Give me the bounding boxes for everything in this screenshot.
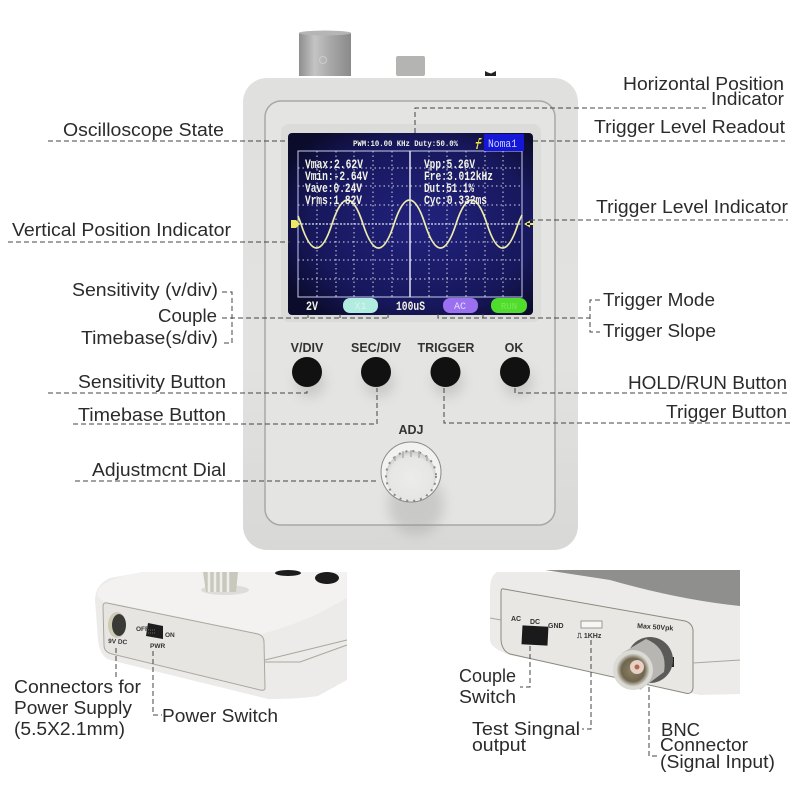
switch captions: ON xyxy=(165,632,175,639)
icon: top BNC connector xyxy=(299,30,351,76)
AC pill: AC xyxy=(454,302,466,313)
top surface xyxy=(97,572,347,634)
knob and button shadows xyxy=(295,367,533,535)
icon: trigger slope xyxy=(476,138,482,149)
screen glass xyxy=(545,570,740,606)
icon: trigger level marker xyxy=(524,220,534,228)
label: Oscilloscope State: Oscilloscope State xyxy=(63,120,224,140)
label: BNC Connector: BNC xyxy=(661,720,700,740)
measurements left: Vrms:1.82V xyxy=(305,194,362,208)
icon: adjustment dial xyxy=(381,442,441,502)
switch captions xyxy=(511,616,564,630)
label: Horizontal Position Indicator: Indicator xyxy=(711,89,784,109)
label: Power Switch: Power Switch xyxy=(162,706,278,726)
label: BNC Connector xyxy=(660,720,775,772)
label: Trigger Slope: Trigger Slope xyxy=(603,321,716,341)
icon: dial base xyxy=(201,572,249,595)
side panel xyxy=(501,589,693,693)
measurements left: Vave:0.24V xyxy=(305,182,362,196)
panel: power side view xyxy=(95,570,347,699)
inner panel outline xyxy=(265,101,555,525)
label: Trigger Button: Trigger Button xyxy=(666,402,787,422)
sensitivity value: 2V xyxy=(306,300,318,314)
button captions: V/DIV xyxy=(291,341,324,355)
trigger mode readout xyxy=(484,134,524,151)
icon: buttons xyxy=(275,570,339,584)
label: Sensitivity Button: Sensitivity Button xyxy=(78,372,226,392)
icon: top test tab xyxy=(396,56,425,76)
AC pill xyxy=(443,298,478,313)
label: Connectors for Power Supply xyxy=(14,677,141,739)
icon: power switch xyxy=(146,623,163,639)
leader lines: input side xyxy=(520,640,659,756)
label: Couple Switch xyxy=(459,666,516,707)
panel: oscilloscope front view xyxy=(243,30,578,550)
switch captions: GND xyxy=(548,623,564,630)
label: Test Signal output: output xyxy=(472,735,526,755)
label: Trigger Mode: Trigger Mode xyxy=(603,290,715,310)
grid xyxy=(298,151,522,297)
buttons xyxy=(292,357,530,387)
icon: top black clip xyxy=(485,71,496,76)
icon: test signal terminal xyxy=(581,621,602,628)
leader lines: front view xyxy=(8,108,790,481)
switch captions: OFF xyxy=(136,626,149,633)
label: Connectors for Power Supply: (5.5X2.1mm) xyxy=(14,719,125,739)
panel: input side view xyxy=(490,570,740,695)
label: Couple Switch: Switch xyxy=(459,687,516,707)
measurements right: Vpp:5.26V xyxy=(424,158,475,172)
button captions: ADJ xyxy=(398,423,424,437)
side panel xyxy=(103,603,265,690)
leader lines: power side xyxy=(116,648,162,715)
label: Couple Switch: Couple xyxy=(459,666,516,686)
PWM readout: PWM:10.00 KHz Duty:50.0% xyxy=(353,140,458,149)
button captions: TRIGGER xyxy=(418,341,474,355)
trigger mode readout: Noma1 xyxy=(488,139,517,151)
label: BNC Connector: (Signal Input) xyxy=(660,752,775,772)
icon: coupling switch xyxy=(521,625,548,646)
timebase value: 100uS xyxy=(396,300,425,314)
label: Trigger Level Indicator: Trigger Level Indicator xyxy=(596,197,788,217)
label: Timebase(s/div): Timebase(s/div) xyxy=(81,328,218,348)
label: Test Signal output: Test Singnal xyxy=(472,719,580,739)
label: Connectors for Power Supply: Connectors for xyxy=(14,677,141,697)
measurements right: Dut:51.1% xyxy=(424,182,474,196)
RUN pill: RUN xyxy=(501,302,517,312)
label: HOLD/RUN Button: HOLD/RUN Button xyxy=(628,373,787,393)
device body xyxy=(490,572,740,695)
label: BNC Connector: Connector xyxy=(660,735,748,755)
device body xyxy=(95,572,347,699)
coupling multiplier pill: X1 xyxy=(354,302,367,313)
button captions: SEC/DIV xyxy=(351,341,402,355)
label: Vertical Position Indicator: Vertical Position Indicator xyxy=(12,220,231,240)
switch captions: PWR xyxy=(150,643,165,650)
label: Connectors for Power Supply: Power Supply xyxy=(14,698,132,718)
voltage caption: Max 50Vpk xyxy=(637,623,674,633)
label: Couple: Couple xyxy=(158,306,217,326)
label: Adjustment Dial: Adjustmcnt Dial xyxy=(92,460,226,480)
label: Horizontal Position Indicator xyxy=(623,74,784,109)
screen bezel xyxy=(281,124,541,322)
label: Horizontal Position Indicator: Horizontal Position xyxy=(623,74,784,94)
test signal caption: ⎍ 1KHz xyxy=(576,633,602,640)
measurements left: Vmax:2.62V xyxy=(305,158,363,172)
jack caption: 9V DC xyxy=(108,638,128,646)
measurements left xyxy=(305,158,368,208)
label: Timebase Button: Timebase Button xyxy=(78,405,226,425)
measurements left: Vmin:-2.64V xyxy=(305,170,368,184)
button captions xyxy=(291,341,523,437)
button captions: OK xyxy=(505,341,523,355)
icon: BNC connector xyxy=(613,637,674,690)
icon: vertical position marker xyxy=(291,220,300,228)
switch captions: AC xyxy=(511,616,521,623)
switch captions xyxy=(136,626,175,650)
icon: power jack xyxy=(108,612,126,638)
label: Trigger Level Readout: Trigger Level Readout xyxy=(594,117,785,137)
label: Test Signal output xyxy=(472,719,580,755)
coupling multiplier pill xyxy=(343,298,378,313)
waveform xyxy=(298,200,522,248)
measurements right xyxy=(424,158,493,208)
RUN pill xyxy=(491,298,527,313)
measurements right: Cyc:0.332ms xyxy=(424,194,487,208)
switch captions: DC xyxy=(530,619,540,626)
measurements right: Fre:3.012kHz xyxy=(424,170,493,184)
panel: LCD screen xyxy=(288,133,534,315)
label: Sensitivity (v/div): Sensitivity (v/div) xyxy=(72,280,218,300)
device body xyxy=(243,78,578,550)
